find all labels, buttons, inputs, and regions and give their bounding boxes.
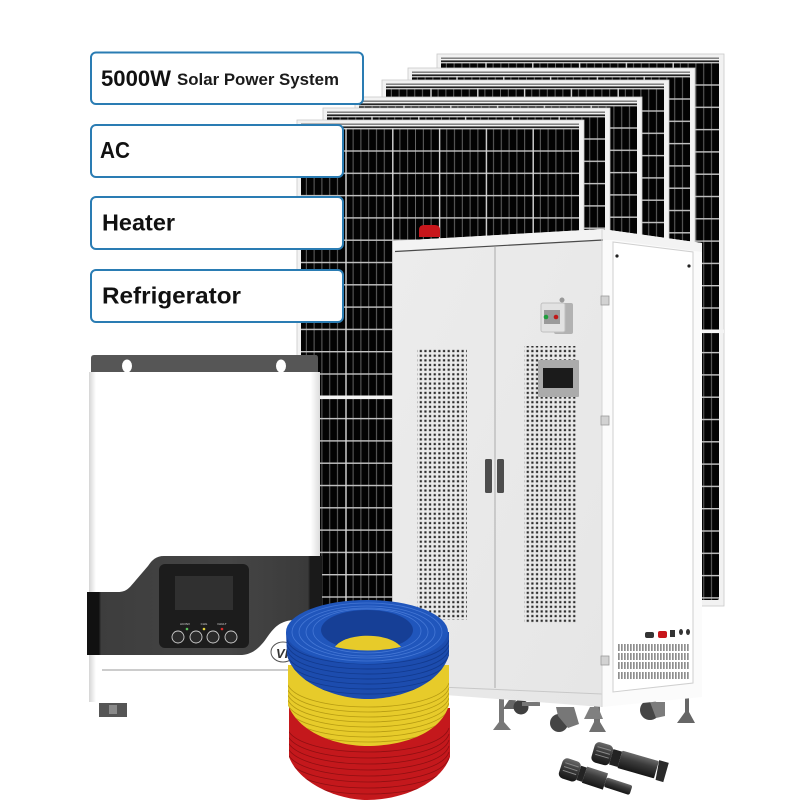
inverter dark band xyxy=(87,556,322,655)
coil centre hole xyxy=(321,610,413,650)
connector top xyxy=(590,741,669,782)
solar panel 3 xyxy=(355,97,642,649)
control panel xyxy=(159,564,249,648)
red cable coil xyxy=(287,708,450,800)
cabinet front face xyxy=(393,229,602,707)
cabinet side face xyxy=(602,229,702,707)
label: 5000W Solar Power System xyxy=(91,52,363,104)
cable reels xyxy=(286,600,450,800)
cabinet top lip xyxy=(393,229,702,252)
door split and plinth lines xyxy=(494,247,496,688)
infographic canvas xyxy=(87,52,724,800)
touch screen xyxy=(538,360,579,397)
control switch box xyxy=(541,298,573,334)
status labels: FAULT xyxy=(217,622,227,626)
inverter body xyxy=(89,372,320,702)
inverter xyxy=(87,355,322,717)
solar panel array xyxy=(297,54,724,672)
status labels: AC/INV xyxy=(180,622,190,626)
label: Heater xyxy=(91,197,343,249)
solar panel 6 (rear) xyxy=(437,54,724,606)
inverter logo xyxy=(271,642,295,662)
side terminals xyxy=(645,629,690,638)
hinges xyxy=(601,296,609,665)
label: Heater: Heater xyxy=(102,210,175,236)
icon: red beacon xyxy=(419,225,440,237)
yellow cable coil xyxy=(287,665,449,746)
solar connectors xyxy=(558,741,669,800)
label: 5000W Solar Power System: Solar Power System xyxy=(177,70,339,89)
inverter foot xyxy=(99,703,127,717)
right door perforation xyxy=(524,346,577,623)
cabinet legs and casters xyxy=(493,697,695,732)
cabinet side door xyxy=(613,242,693,692)
inverter base line xyxy=(102,669,300,671)
solar panel 4 xyxy=(382,80,669,632)
lcd screen xyxy=(175,576,233,610)
status labels xyxy=(180,622,227,626)
side vents xyxy=(618,644,689,679)
yellow core xyxy=(335,636,401,650)
door handles xyxy=(485,459,504,493)
status labels: CHG xyxy=(201,622,208,626)
status leds xyxy=(186,628,223,630)
label: AC xyxy=(91,125,343,177)
label: AC: AC xyxy=(100,137,130,163)
inverter mounting bracket xyxy=(91,355,318,372)
label: Refrigerator: Refrigerator xyxy=(102,282,241,308)
label: Refrigerator xyxy=(91,270,343,322)
blue cable coil xyxy=(286,600,449,699)
left door perforation xyxy=(417,348,467,620)
battery cabinet xyxy=(393,225,702,732)
solar panel 5 xyxy=(408,68,695,620)
label: 5000W Solar Power System: 5000W xyxy=(101,66,172,91)
solar panel 1 (front) xyxy=(297,120,584,672)
solar panel 2 xyxy=(323,108,610,660)
connector bottom xyxy=(558,757,634,800)
keypad buttons xyxy=(172,631,237,643)
inverter logo: VI xyxy=(276,646,289,661)
